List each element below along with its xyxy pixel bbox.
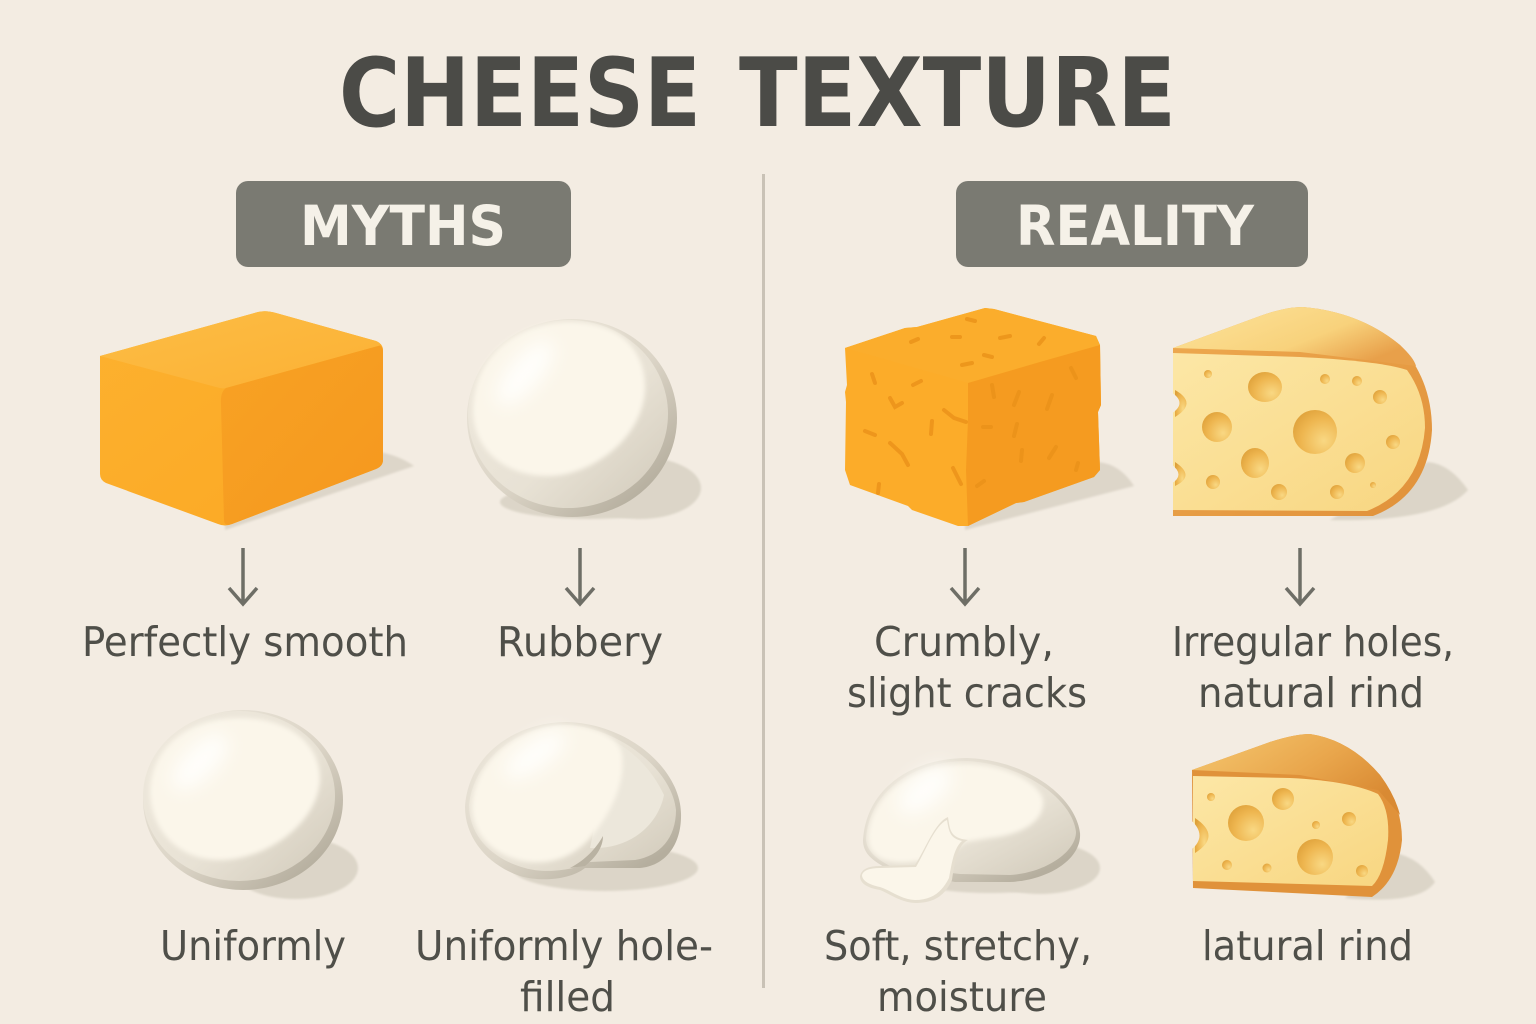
label: irregular holes, natural rind: natural rind	[1198, 669, 1424, 717]
title	[339, 39, 1176, 149]
badge: reality: REALITY	[1016, 194, 1255, 258]
icon: mozzarella ball rubbery	[467, 319, 701, 519]
label: soft, stretchy, moisture	[824, 922, 1092, 1021]
label: uniformly hole-filled	[415, 922, 713, 1021]
icon: crumbly cheddar block	[845, 308, 1134, 530]
icon: mozzarella lump hole-filled	[465, 722, 698, 891]
icon: soft stretchy mozzarella	[860, 757, 1100, 903]
label: crumbly, slight cracks	[847, 618, 1087, 717]
arrow: irregular holes	[1286, 548, 1314, 604]
label: irregular holes, natural rind: Irregular holes,	[1172, 618, 1454, 666]
icon: smooth cheddar block	[100, 311, 414, 530]
label: rubbery: Rubbery	[497, 618, 663, 666]
badge: myths	[236, 181, 571, 267]
label: soft, stretchy, moisture: Soft, stretchy,	[824, 922, 1092, 970]
label: natural rind cropped: latural rind	[1202, 922, 1413, 970]
label: uniformly hole-filled: Uniformly hole-	[415, 922, 713, 970]
arrow: rubbery	[566, 548, 594, 604]
badge: reality	[956, 181, 1308, 267]
label: uniformly hole-filled: filled	[520, 973, 615, 1021]
label: crumbly, slight cracks: Crumbly,	[874, 618, 1054, 666]
badge: myths: MYTHS	[300, 194, 506, 258]
center divider	[762, 174, 765, 988]
icon: mozzarella ball uniformly	[143, 710, 358, 899]
label: soft, stretchy, moisture: moisture	[877, 973, 1047, 1021]
label: perfectly smooth: Perfectly smooth	[82, 618, 408, 666]
arrow: crumbly	[951, 548, 979, 604]
label: uniformly: Uniformly	[160, 922, 346, 970]
label: irregular holes, natural rind	[1172, 618, 1454, 717]
icon: swiss wedge with holes	[1171, 307, 1468, 520]
icon: small wedge natural rind	[1191, 734, 1435, 900]
title: TEXTURE	[739, 39, 1176, 149]
arrow: perfectly smooth	[229, 548, 257, 604]
label: crumbly, slight cracks: slight cracks	[847, 669, 1087, 717]
title: CHEESE	[339, 39, 701, 149]
